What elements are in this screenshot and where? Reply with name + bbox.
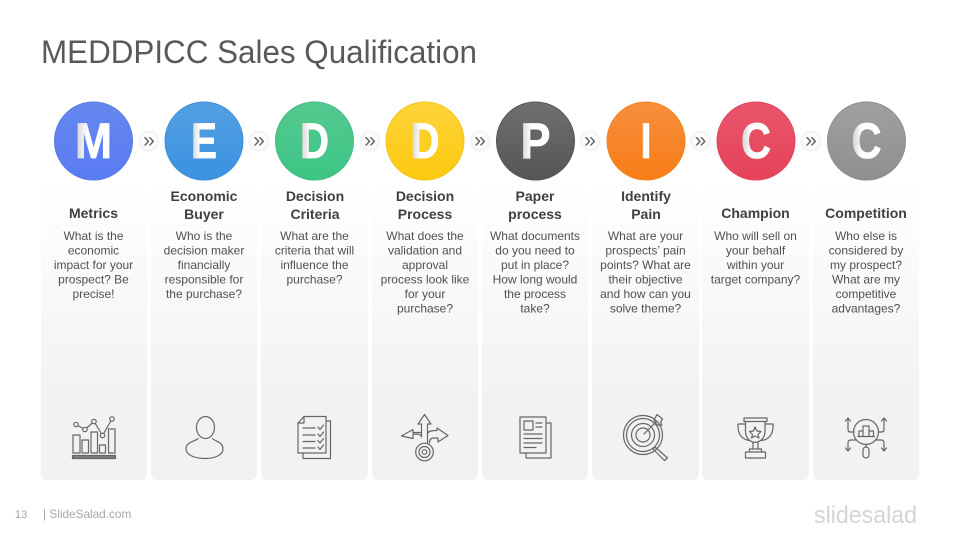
arrow chip 1 <box>138 129 160 152</box>
badge: P: P <box>520 113 550 169</box>
description: Metrics: precise! <box>72 287 115 301</box>
description: Decision Process <box>381 229 470 316</box>
description: Champion: your behalf <box>726 244 786 258</box>
heading: Economic Buyer: Economic <box>171 188 238 204</box>
icon: trophy <box>738 418 773 458</box>
panel: Metrics <box>41 102 147 480</box>
icon: target with magnifier <box>624 414 668 460</box>
description: Competition: considered by <box>829 244 903 258</box>
heading: Identify Pain <box>621 188 671 222</box>
panel: Champion <box>702 102 809 480</box>
description: Identify Pain: their objective <box>608 272 683 286</box>
badge: D <box>276 102 354 180</box>
badge: M: M <box>75 113 112 169</box>
description: Economic Buyer: Who is the <box>176 229 233 243</box>
panel: Decision Criteria <box>261 102 368 480</box>
panel: Paper process <box>482 102 588 480</box>
arrow chip 6: » <box>695 129 706 152</box>
heading: Identify Pain: Pain <box>631 206 661 222</box>
description: Identify Pain: prospects’ pain <box>605 244 686 258</box>
description: Competition: competitive <box>836 287 897 301</box>
description: Decision Process: validation and <box>388 244 462 258</box>
description: Paper process: the process <box>504 287 566 301</box>
badge: C: C <box>741 113 771 169</box>
description: Decision Criteria: influence the <box>280 258 349 272</box>
panel: Identify Pain <box>592 102 699 480</box>
heading: Decision Criteria: Decision <box>286 188 344 204</box>
heading: Decision Process: Decision <box>396 188 454 204</box>
heading: Competition: Competition <box>825 205 907 221</box>
description: Economic Buyer <box>164 229 244 301</box>
arrow chip 2: » <box>253 129 265 152</box>
arrow chip 3: » <box>364 129 376 152</box>
panel: Decision Process <box>372 102 478 480</box>
heading: Decision Criteria <box>286 188 344 222</box>
badge: E <box>165 102 243 180</box>
badge: I: I <box>640 113 652 169</box>
heading: Decision Process <box>396 188 454 222</box>
arrow chip 7 <box>800 129 822 152</box>
description: Decision Criteria: What are the <box>280 229 349 243</box>
description: Competition: Who else is <box>835 229 897 243</box>
badge: D: D <box>300 113 329 169</box>
title: MEDDPICC Sales Qualification <box>41 34 477 70</box>
icon: person <box>186 416 223 458</box>
arrow chip 5: » <box>584 129 596 152</box>
arrow chip 4: » <box>474 129 486 152</box>
icon: paper documents <box>520 417 551 458</box>
description: Metrics: prospect? Be <box>58 272 129 286</box>
description: Competition: my prospect? <box>830 258 902 272</box>
heading: Paper process <box>508 188 562 222</box>
description: Decision Process: for your <box>405 287 445 301</box>
badge: C <box>717 102 795 180</box>
description: Paper process: What documents <box>490 229 580 243</box>
description: Identify Pain: points? What are <box>600 258 691 272</box>
description: Paper process: put in place? <box>501 258 569 272</box>
heading: Economic Buyer <box>171 188 238 222</box>
description: Decision Criteria: criteria that will <box>275 244 354 258</box>
description: Decision Process: process look like <box>381 272 470 286</box>
description: Champion <box>711 229 801 286</box>
arrow chip 3 <box>360 129 380 152</box>
arrow chip 7: » <box>805 129 817 152</box>
description: Identify Pain: What are your <box>608 229 683 243</box>
description: Decision Criteria <box>275 229 354 286</box>
badge: P <box>496 102 574 180</box>
footer source: | SlideSalad.com <box>43 507 131 521</box>
icon: bar chart with line <box>72 417 116 458</box>
panel: Competition <box>813 102 919 480</box>
icon: analytics with arrows <box>846 418 886 458</box>
description: Paper process: take? <box>520 302 550 316</box>
description: Economic Buyer: the purchase? <box>166 287 242 301</box>
icon: checklist document <box>298 416 330 458</box>
description: Economic Buyer: responsible for <box>165 272 243 286</box>
arrow chip 6 <box>690 129 711 152</box>
description: Identify Pain: solve theme? <box>610 302 682 316</box>
badge: D: D <box>410 113 440 169</box>
arrow chip 4 <box>470 129 490 152</box>
heading: Decision Process: Process <box>398 206 452 222</box>
heading: Identify Pain: Identify <box>621 188 671 204</box>
heading: Paper process: Paper <box>516 188 555 204</box>
description: Paper process: do you need to <box>495 244 575 258</box>
badge: M <box>54 102 132 180</box>
arrow chip 5 <box>580 129 600 152</box>
description: Metrics <box>54 229 133 301</box>
description: Competition: What are my <box>832 272 900 286</box>
badge: E: E <box>191 113 217 169</box>
description: Competition: advantages? <box>832 302 901 316</box>
badge: C <box>828 102 906 180</box>
arrow chip 2 <box>248 129 270 152</box>
description: Decision Process: What does the <box>386 229 464 243</box>
description: Champion: Who will sell on <box>714 229 797 243</box>
description: Identify Pain <box>600 229 691 316</box>
description: Economic Buyer: decision maker <box>164 244 244 258</box>
heading: Decision Criteria: Criteria <box>290 206 340 222</box>
description: Metrics: What is the <box>63 229 124 243</box>
description: Decision Process: purchase? <box>397 302 453 316</box>
description: Metrics: economic <box>68 244 119 258</box>
description: Competition <box>829 229 903 316</box>
heading: Metrics: Metrics <box>69 205 118 221</box>
icon: branching arrows with gear <box>402 414 448 461</box>
arrow chip 1: » <box>143 129 155 152</box>
description: Identify Pain: and how can you <box>600 287 691 301</box>
badge: C: C <box>852 113 882 169</box>
heading: Champion: Champion <box>721 205 790 221</box>
heading: Economic Buyer: Buyer <box>184 206 224 222</box>
description: Economic Buyer: financially <box>178 258 230 272</box>
badge: D <box>386 102 464 180</box>
description: Decision Criteria: purchase? <box>286 272 343 286</box>
heading: Paper process: process <box>508 206 562 222</box>
description: Metrics: impact for your <box>54 258 133 272</box>
logo: slidesalad wordmark: slidesalad <box>814 502 917 529</box>
panel: Economic Buyer <box>151 102 257 480</box>
description: Champion: within your <box>726 258 784 272</box>
page number: 13 <box>15 509 27 521</box>
description: Paper process: How long would <box>493 272 577 286</box>
description: Champion: target company? <box>711 272 801 286</box>
description: Decision Process: approval <box>402 258 448 272</box>
badge: I <box>607 102 685 180</box>
description: Paper process <box>490 229 580 316</box>
